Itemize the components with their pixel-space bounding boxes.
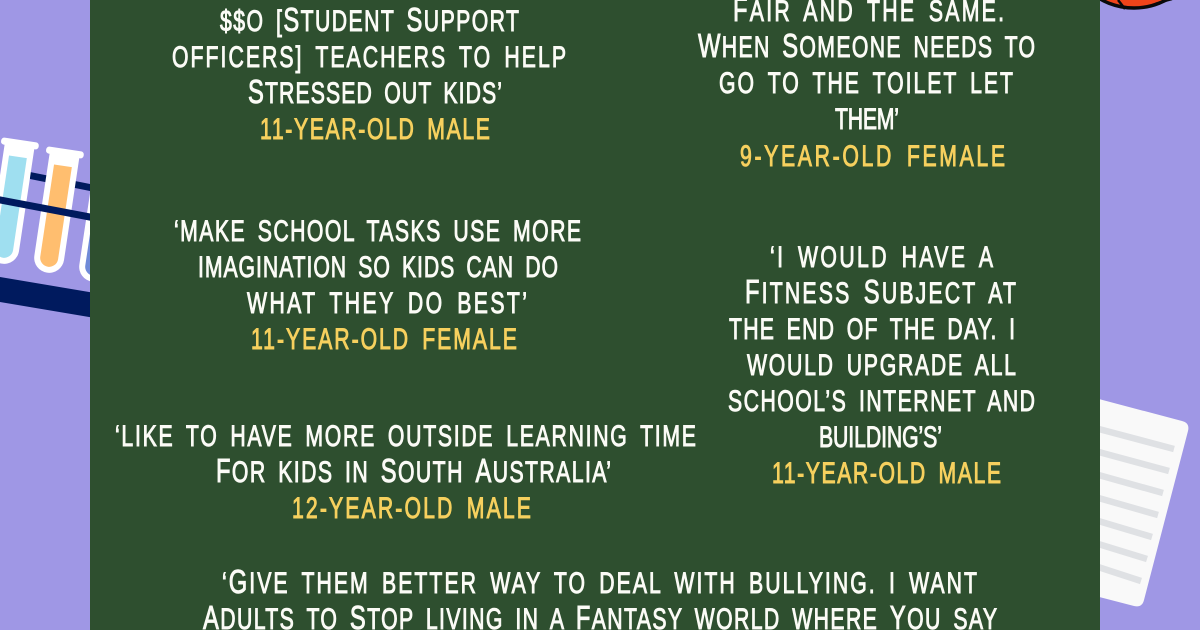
quote: fair and the same: GO TO THE TOILET LET	[719, 68, 1013, 100]
quote: school tasks imagination: IMAGINATION SO KIDS CAN DO	[198, 252, 558, 284]
icon: sheet of paper	[1080, 394, 1188, 606]
quote: fair and the same	[698, 0, 1035, 173]
quote: student support officers: STRESSED OUT KIDS’	[248, 74, 502, 111]
quote: school tasks imagination: WHAT THEY DO BEST’	[247, 288, 527, 320]
quote: school tasks imagination: 11-YEAR-OLD FEMALE	[251, 324, 517, 356]
quote: fitness subject: ‘I WOULD HAVE A	[770, 242, 994, 274]
quote: bullying	[203, 564, 997, 630]
quote: student support officers: 11-YEAR-OLD MALE	[260, 114, 490, 146]
icon: test tubes in rack	[0, 137, 125, 318]
quote: fitness subject: THE END OF THE DAY. I	[729, 314, 1015, 346]
quote: fair and the same: THEM’	[835, 104, 899, 136]
quote: fitness subject: FITNESS SUBJECT AT	[745, 274, 1016, 311]
quote: outside learning time: ‘LIKE TO HAVE MORE OUTSIDE LEARNING TIME	[115, 421, 696, 453]
quote: school tasks imagination	[174, 216, 581, 356]
quote: fitness subject: 11-YEAR-OLD MALE	[772, 458, 1001, 490]
quote: student support officers	[172, 2, 566, 146]
quote: school tasks imagination: ‘MAKE SCHOOL TASKS USE MORE	[174, 216, 581, 248]
quote: fitness subject: SCHOOL’S INTERNET AND	[728, 386, 1035, 418]
icon: red ball at top	[1066, 0, 1200, 9]
quote: fair and the same: 9-YEAR-OLD FEMALE	[740, 141, 1005, 173]
quote: bullying: ‘GIVE THEM BETTER WAY TO DEAL WITH BULLYING. I WANT	[222, 564, 977, 601]
quote: student support officers: OFFICERS] TEACHERS TO HELP	[172, 42, 566, 74]
quote: fitness subject: BUILDING’S’	[819, 422, 942, 454]
quote: student support officers: $$O [STUDENT SUPPORT	[220, 2, 519, 39]
quote: outside learning time: FOR KIDS IN SOUTH AUSTRALIA’	[216, 453, 611, 490]
quote: fitness subject: WOULD UPGRADE ALL	[747, 350, 1016, 382]
quote: fair and the same: WHEN SOMEONE NEEDS TO	[698, 28, 1035, 65]
quote: outside learning time	[115, 421, 696, 525]
quote: fitness subject	[728, 242, 1035, 490]
quote: outside learning time: 12-YEAR-OLD MALE	[292, 493, 531, 525]
